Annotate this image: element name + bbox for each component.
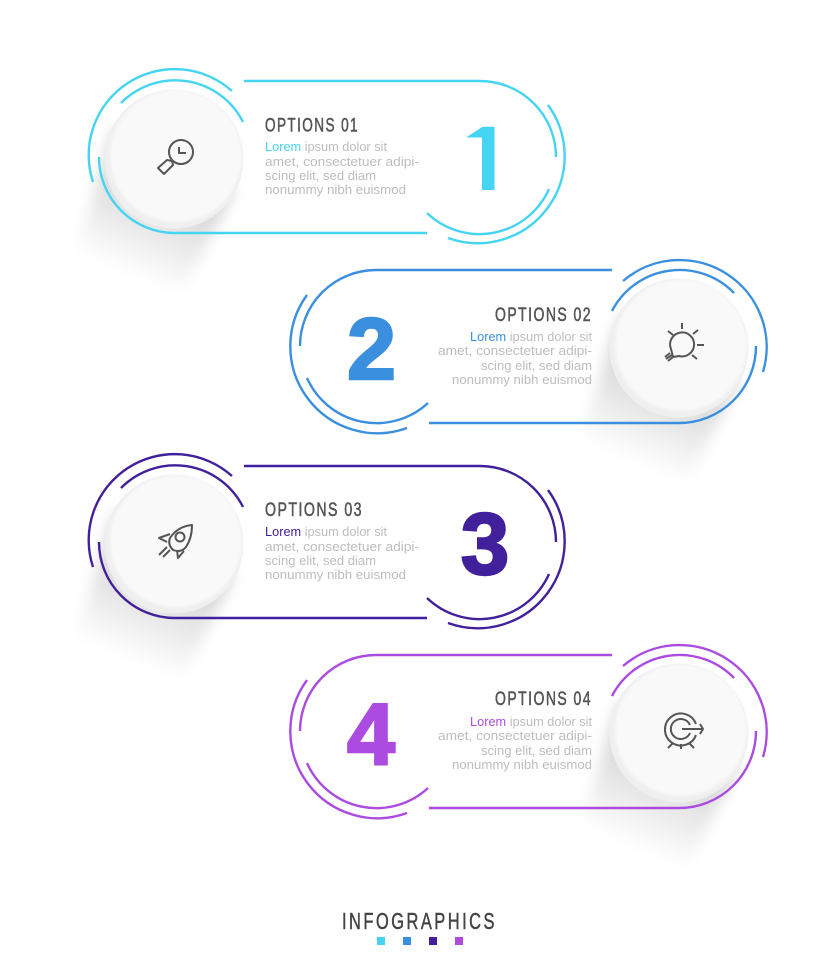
panel: option 4	[290, 645, 767, 862]
text block 2	[438, 329, 592, 387]
number 1: 1	[460, 108, 512, 210]
text block 4: nonummy nibh euismod	[452, 757, 592, 772]
disc 3	[104, 474, 244, 614]
disc shadow 1	[65, 128, 234, 288]
number 4: 4	[347, 686, 395, 783]
text block 1: amet, consectetuer adipi-	[265, 154, 419, 169]
text block 4	[438, 714, 592, 772]
capsule outline 2	[290, 260, 767, 433]
text block 2: scing elit, sed diam	[481, 358, 592, 373]
text block 3: scing elit, sed diam	[265, 553, 376, 568]
icon: magnifier with clock	[158, 140, 193, 174]
panel: option 1	[65, 69, 565, 288]
number 3: 3	[461, 496, 509, 593]
disc shadow 4	[570, 702, 739, 862]
text block 4: Lorem ipsum dolor sit	[470, 714, 592, 729]
capsule outline 3	[89, 454, 565, 628]
capsule outline 4	[290, 645, 767, 818]
number 2: 2	[347, 301, 396, 398]
capsule outline 1	[89, 69, 565, 243]
icon: rocket	[159, 525, 192, 558]
disc 2	[610, 278, 748, 418]
heading: options 01: OPTIONS 01	[265, 114, 359, 136]
text block 3: amet, consectetuer adipi-	[265, 539, 419, 554]
text block 1: scing elit, sed diam	[265, 168, 376, 183]
text block 3: nonummy nibh euismod	[265, 567, 406, 582]
text block 1: nonummy nibh euismod	[265, 182, 406, 197]
icon: light bulb	[665, 323, 704, 361]
footer colour squares	[377, 937, 463, 945]
disc 4	[610, 664, 748, 802]
text block 4: amet, consectetuer adipi-	[438, 728, 592, 743]
disc 1	[104, 90, 244, 228]
heading: options 03: OPTIONS 03	[265, 499, 363, 521]
disc shadow 2	[570, 317, 739, 477]
heading: options 02: OPTIONS 02	[495, 304, 592, 326]
text block 3: Lorem ipsum dolor sit	[265, 524, 387, 539]
disc shadow 3	[65, 513, 234, 673]
text block 4: scing elit, sed diam	[481, 743, 592, 758]
footer title: INFOGRAPHICS	[342, 908, 497, 934]
text block 1	[265, 139, 419, 197]
icon: target with arrow	[665, 713, 703, 749]
panel: option 3	[65, 454, 565, 673]
text block 3	[265, 524, 419, 582]
panel: option 2	[290, 260, 767, 477]
text block 2: nonummy nibh euismod	[452, 372, 592, 387]
text block 2: amet, consectetuer adipi-	[438, 343, 592, 358]
text block 2: Lorem ipsum dolor sit	[470, 329, 592, 344]
heading: options 04: OPTIONS 04	[495, 688, 592, 710]
text block 1: Lorem ipsum dolor sit	[265, 139, 387, 154]
